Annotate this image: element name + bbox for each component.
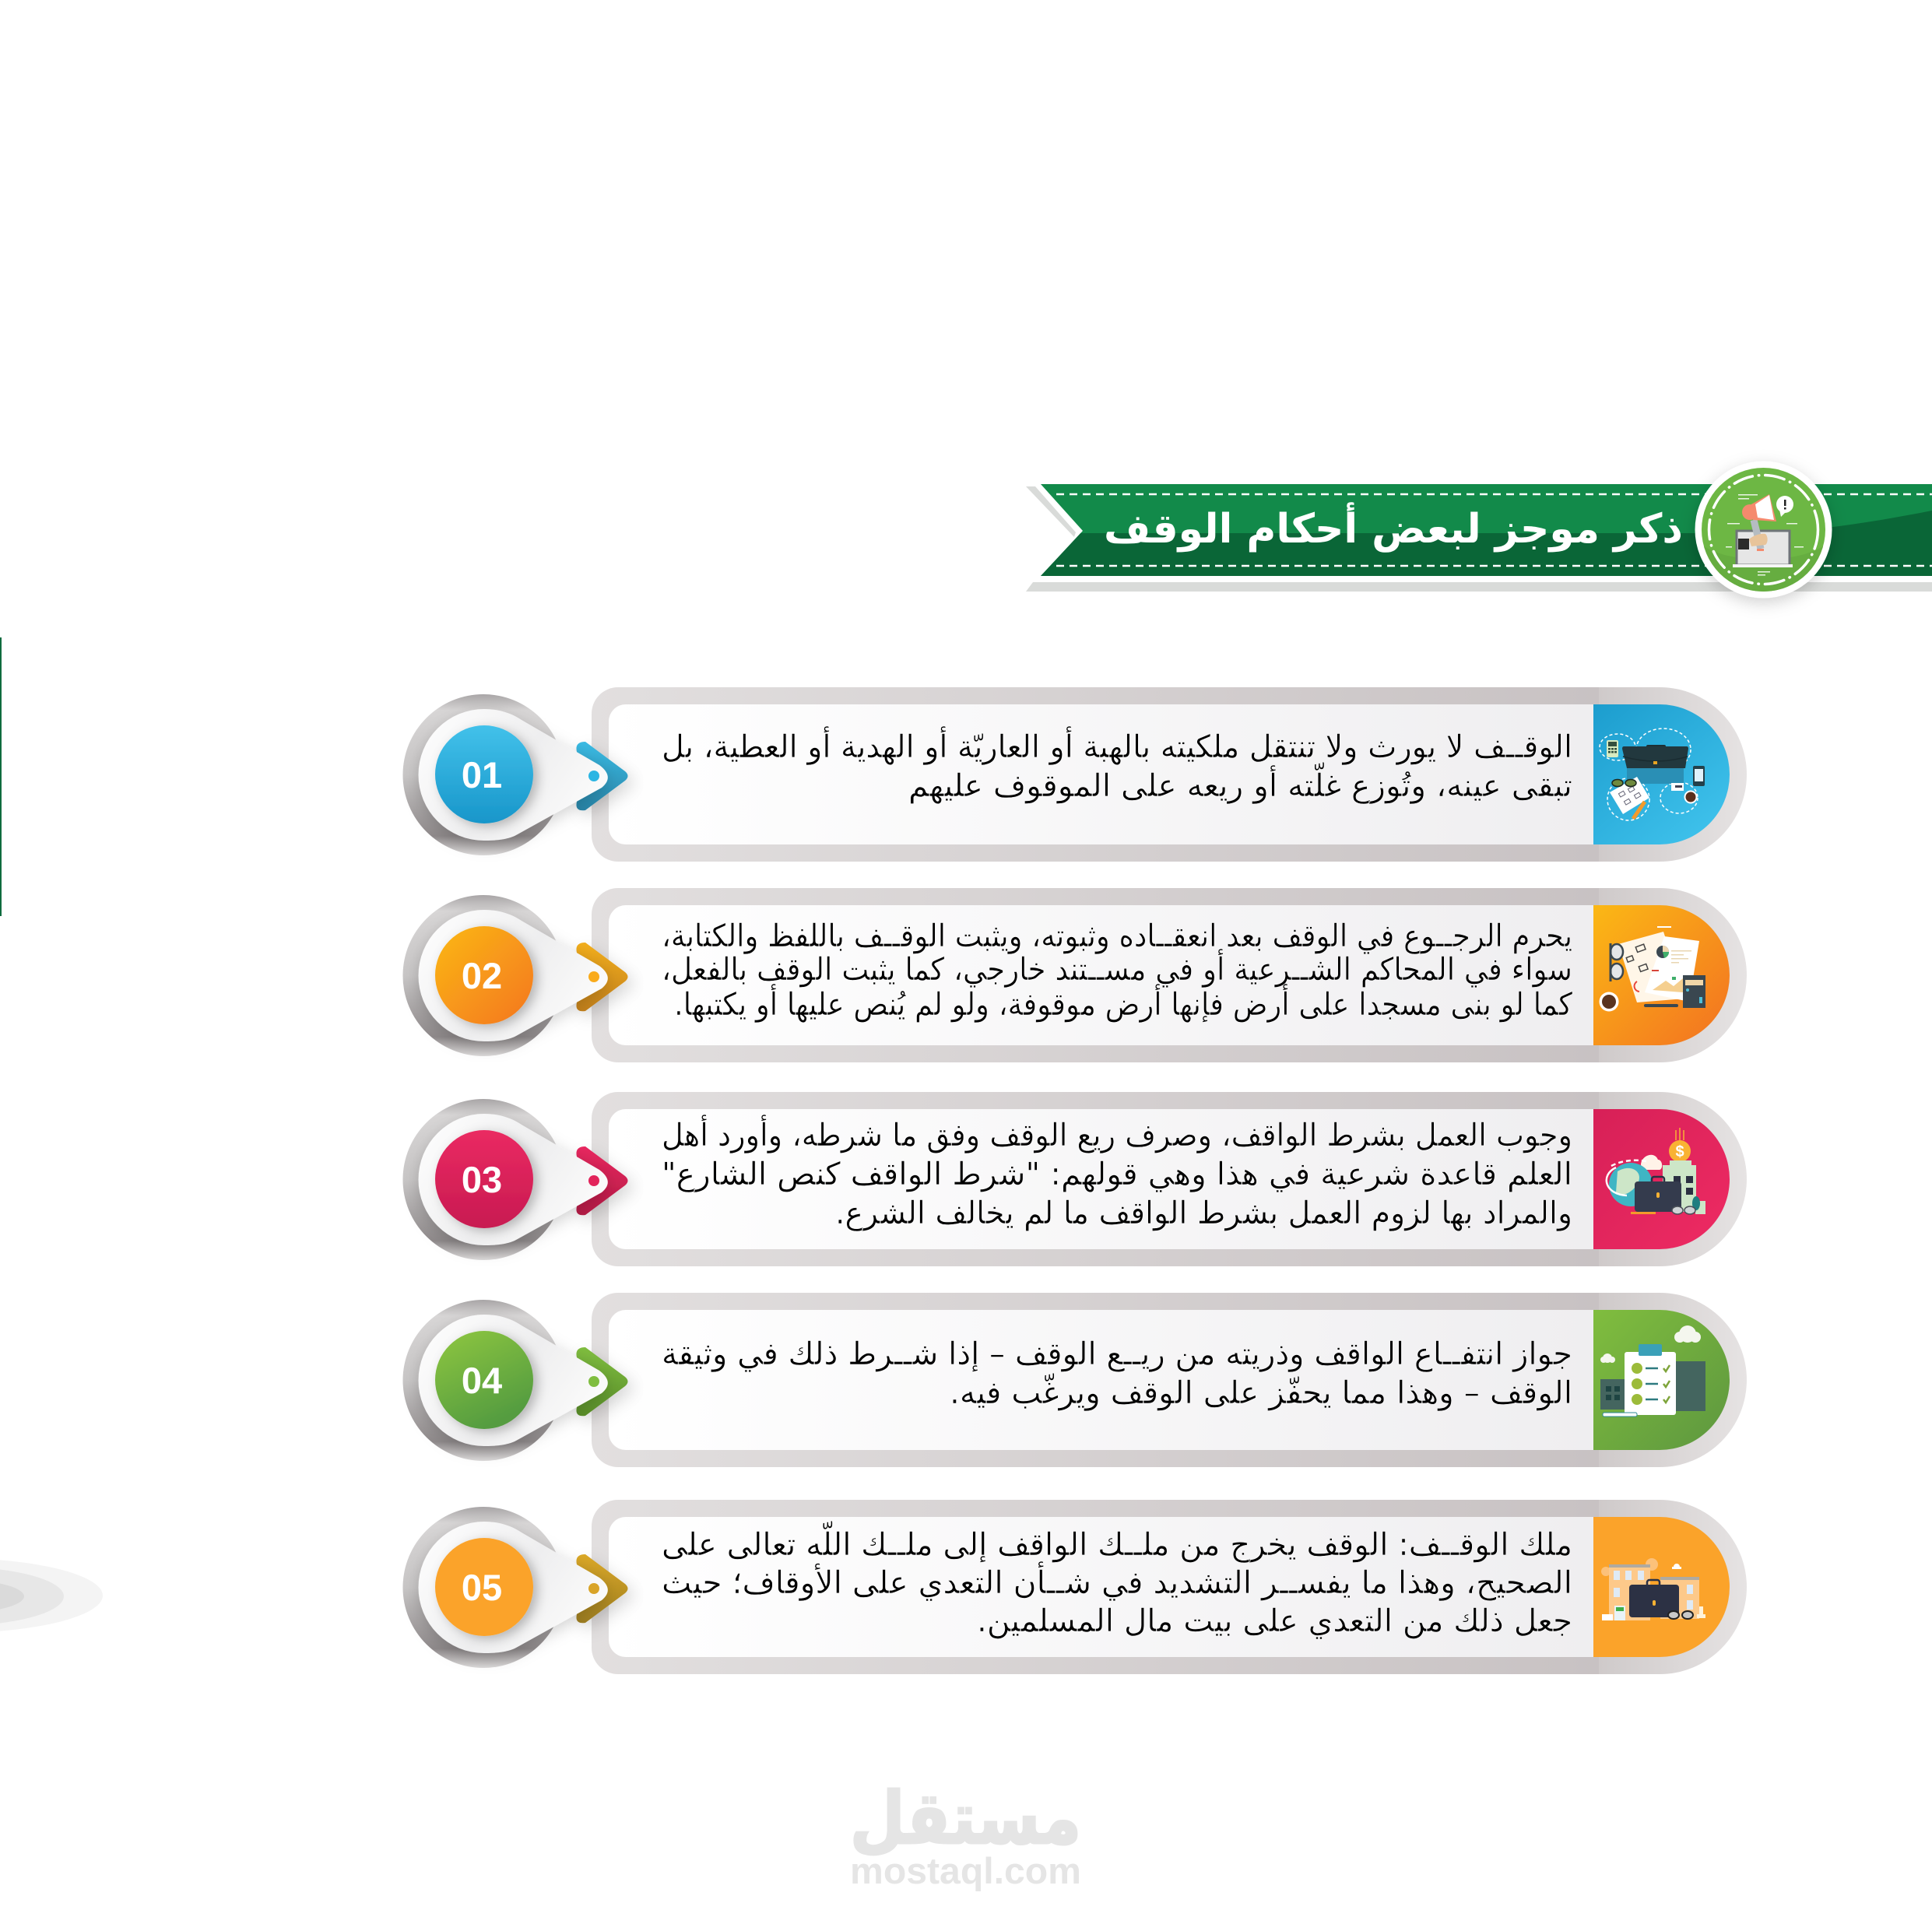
pin 04 (403, 1300, 627, 1461)
pin 05 (403, 1507, 627, 1668)
card 4 coloured panel (1593, 1310, 1730, 1450)
card 3 (403, 1092, 1747, 1266)
watermark logo (850, 1777, 1081, 1891)
card 1 text: الوقــف لا يورث ولا تنتقل ملكيته بالهبة أو العاريّة أو الهدية أو العطية، بل (662, 726, 1572, 765)
icon: documents and calculator (1599, 926, 1705, 1012)
icon: globe, building and briefcase (1607, 1128, 1705, 1214)
card 4 (403, 1293, 1747, 1467)
watermark logo: مستقل (850, 1777, 1081, 1860)
pin 02 (403, 895, 627, 1056)
card 3 text: والمراد بها لزوم العمل بشرط الواقف ما لم يخالف الشرع. (835, 1195, 1572, 1231)
left edge green bar (0, 637, 2, 916)
card 5 (403, 1500, 1747, 1674)
card 4 text: الوقف – وهذا مما يحفّز على الوقف ويرغّب فيه. (950, 1373, 1572, 1411)
card 4 text (662, 1336, 1572, 1411)
card 5 text: جعل ذلك من التعدي على بيت مال المسلمين. (977, 1603, 1572, 1639)
pin 05: 05 (462, 1567, 502, 1608)
pin 04: 04 (462, 1360, 502, 1401)
card 2 coloured panel (1593, 905, 1730, 1045)
card 1 coloured panel (1593, 704, 1730, 844)
card 2 text (662, 918, 1573, 1023)
card 5 text (662, 1521, 1572, 1639)
card 2 text: سواء في المحاكم الشــرعية أو في مســتند خارجي، كما يثبت الوقف بالفعل، (662, 949, 1572, 988)
pin 02: 02 (462, 955, 502, 996)
header banner (1026, 461, 1932, 599)
card 1 (403, 687, 1747, 862)
icon: clipboard and buildings (1600, 1325, 1705, 1417)
watermark logo: mostaql.com (850, 1850, 1081, 1891)
icon: globe, building and briefcase: $ (1675, 1143, 1684, 1160)
header title: ذكر موجز لبعض أحكام الوقف (1104, 502, 1683, 553)
card 5 frame (592, 1500, 1747, 1674)
card 5 text: ملك الوقــف: الوقف يخرج من ملــك الواقف إلى ملــك اللّه تعالى على (662, 1521, 1572, 1564)
icon: megaphone badge (1695, 461, 1832, 599)
card 1 text: تبقى عينه، وتُوزع غلّته أو ريعه على الموقوف عليهم (908, 762, 1572, 804)
card 3 text (662, 1115, 1572, 1231)
card 4 text: جواز انتفــاع الواقف وذريته من ريــع الوقف – إذا شــرط ذلك في وثيقة (662, 1336, 1572, 1372)
card 5 coloured panel (1593, 1517, 1730, 1657)
card 4 frame (592, 1293, 1747, 1467)
card 2 frame (592, 888, 1747, 1062)
card 2 text: يحرم الرجــوع في الوقف بعد انعقــاده وثبوته، ويثبت الوقــف باللفظ والكتابة، (662, 918, 1572, 954)
card 3 frame (592, 1092, 1747, 1266)
card 1 text (662, 726, 1572, 804)
pin 03: 03 (462, 1159, 502, 1200)
pin 01 (403, 694, 627, 855)
card 1 frame (592, 687, 1747, 862)
card 5 text: الصحيح، وهذا ما يفســر التشديد في شــأن التعدي على الأوقاف؛ حيث (662, 1561, 1572, 1601)
pin 03 (403, 1099, 627, 1260)
icon: buildings and briefcase (1601, 1558, 1705, 1620)
decorative grey ellipses at left edge (0, 1558, 103, 1633)
card 3 text: وجوب العمل بشرط الواقف، وصرف ريع الوقف وفق ما شرطه، وأورد أهل (662, 1115, 1572, 1153)
card 3 text: العلم قاعدة شرعية في هذا وهي قولهم: "شرط الواقف كنص الشارع" (662, 1157, 1572, 1192)
icon: briefcase and desk items (1600, 729, 1705, 820)
card 2 text: كما لو بنى مسجدا على أرض فإنها أرض موقوفة، ولو لم يُنص عليها أو يكتبها. (674, 984, 1573, 1023)
card 3 coloured panel (1593, 1109, 1730, 1249)
card 2 (403, 888, 1747, 1062)
pin 01: 01 (462, 754, 502, 795)
